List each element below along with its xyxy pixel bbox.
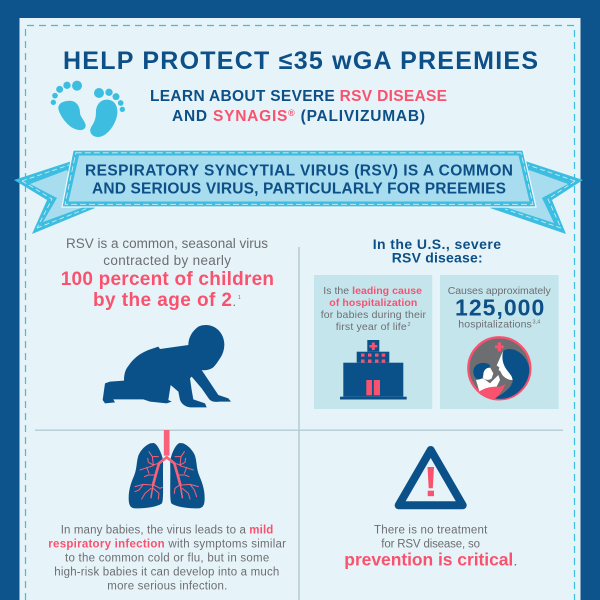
- text block: mild respiratory infection: more serious infection.: [107, 580, 227, 592]
- stat text: leading cause: for babies during their: [321, 309, 426, 321]
- stat text: leading cause: of hospitalization: [329, 297, 417, 309]
- text block: mild respiratory infection: to the common cold or flu, but in some: [65, 552, 269, 564]
- text block: RSV common virus: contracted by nearly: [103, 253, 231, 268]
- ribbon main band: [62, 150, 536, 207]
- text block: RSV common virus: by the age of 2: [93, 290, 232, 311]
- text block: mild respiratory infection: [48, 524, 286, 592]
- text block: RSV common virus: .: [232, 294, 236, 309]
- text block: mild respiratory infection: In many babies, the virus leads to a mild: [61, 524, 273, 536]
- heading: In the U.S.: [373, 236, 501, 266]
- subtitle: ®: [288, 108, 295, 118]
- stat text: leading cause: 2: [408, 322, 411, 328]
- ribbon banner: [14, 150, 583, 234]
- icon: lungs: [129, 430, 205, 508]
- text block: RSV common virus: RSV is a common, seasonal virus: [66, 236, 268, 251]
- text block: prevention is critical: There is no treatment: [374, 524, 488, 536]
- icon: crawling baby: [103, 325, 231, 407]
- text block: RSV common virus: [61, 236, 274, 311]
- ribbon text: RESPIRATORY SYNCYTIAL VIRUS (RSV) IS A COMMON: [85, 162, 513, 180]
- subtitle: [150, 88, 447, 125]
- icon: hospital: [340, 340, 407, 400]
- text block: mild respiratory infection: high-risk babies it can develop into a much: [54, 566, 279, 578]
- text block: RSV common virus: 100 percent of children: [61, 269, 274, 290]
- text block: prevention is critical: [344, 524, 517, 570]
- subtitle: LEARN ABOUT SEVERE RSV DISEASE: [150, 88, 447, 105]
- panel: leading cause of hospitalization: [314, 275, 432, 409]
- icon: mother and child: [468, 337, 530, 399]
- ribbon text: AND SERIOUS VIRUS, PARTICULARLY FOR PREEMIES: [92, 181, 506, 198]
- stat text: 125,000: Causes approximately: [448, 285, 551, 297]
- title: HELP PROTECT ≤35 wGA PREEMIES: [63, 47, 538, 75]
- stat text: leading cause: [321, 285, 426, 333]
- icon: warning triangle: [399, 450, 463, 505]
- divider lines: [35, 247, 563, 600]
- stat text: 125,000: 125,000: [455, 295, 544, 321]
- text block: prevention is critical: .: [514, 553, 517, 569]
- subtitle: (PALIVIZUMAB): [296, 108, 425, 125]
- stat text: leading cause: Is the leading cause: [323, 285, 422, 297]
- heading: In the U.S.: In the U.S., severe: [373, 236, 501, 252]
- stat text: 125,000: [448, 285, 551, 330]
- text block: mild respiratory infection: respiratory infection with symptoms similar: [48, 538, 286, 550]
- stat text: 125,000: hospitalizations: [458, 318, 532, 330]
- heading: In the U.S.: RSV disease:: [392, 250, 483, 266]
- ribbon right tail: [490, 161, 583, 234]
- icon: baby feet: [51, 81, 125, 137]
- ribbon left tail: [14, 161, 95, 234]
- stat text: 125,000: 3,4: [532, 320, 540, 326]
- text block: prevention is critical: prevention is critical: [344, 550, 513, 570]
- ribbon text: [85, 162, 513, 198]
- stat text: leading cause: first year of life: [336, 321, 407, 333]
- subtitle: AND SYNAGIS: [172, 108, 287, 125]
- panel: 125,000 hospitalizations: [440, 275, 559, 409]
- text block: RSV common virus: 1: [238, 295, 241, 301]
- text block: prevention is critical: for RSV disease, so: [381, 538, 480, 550]
